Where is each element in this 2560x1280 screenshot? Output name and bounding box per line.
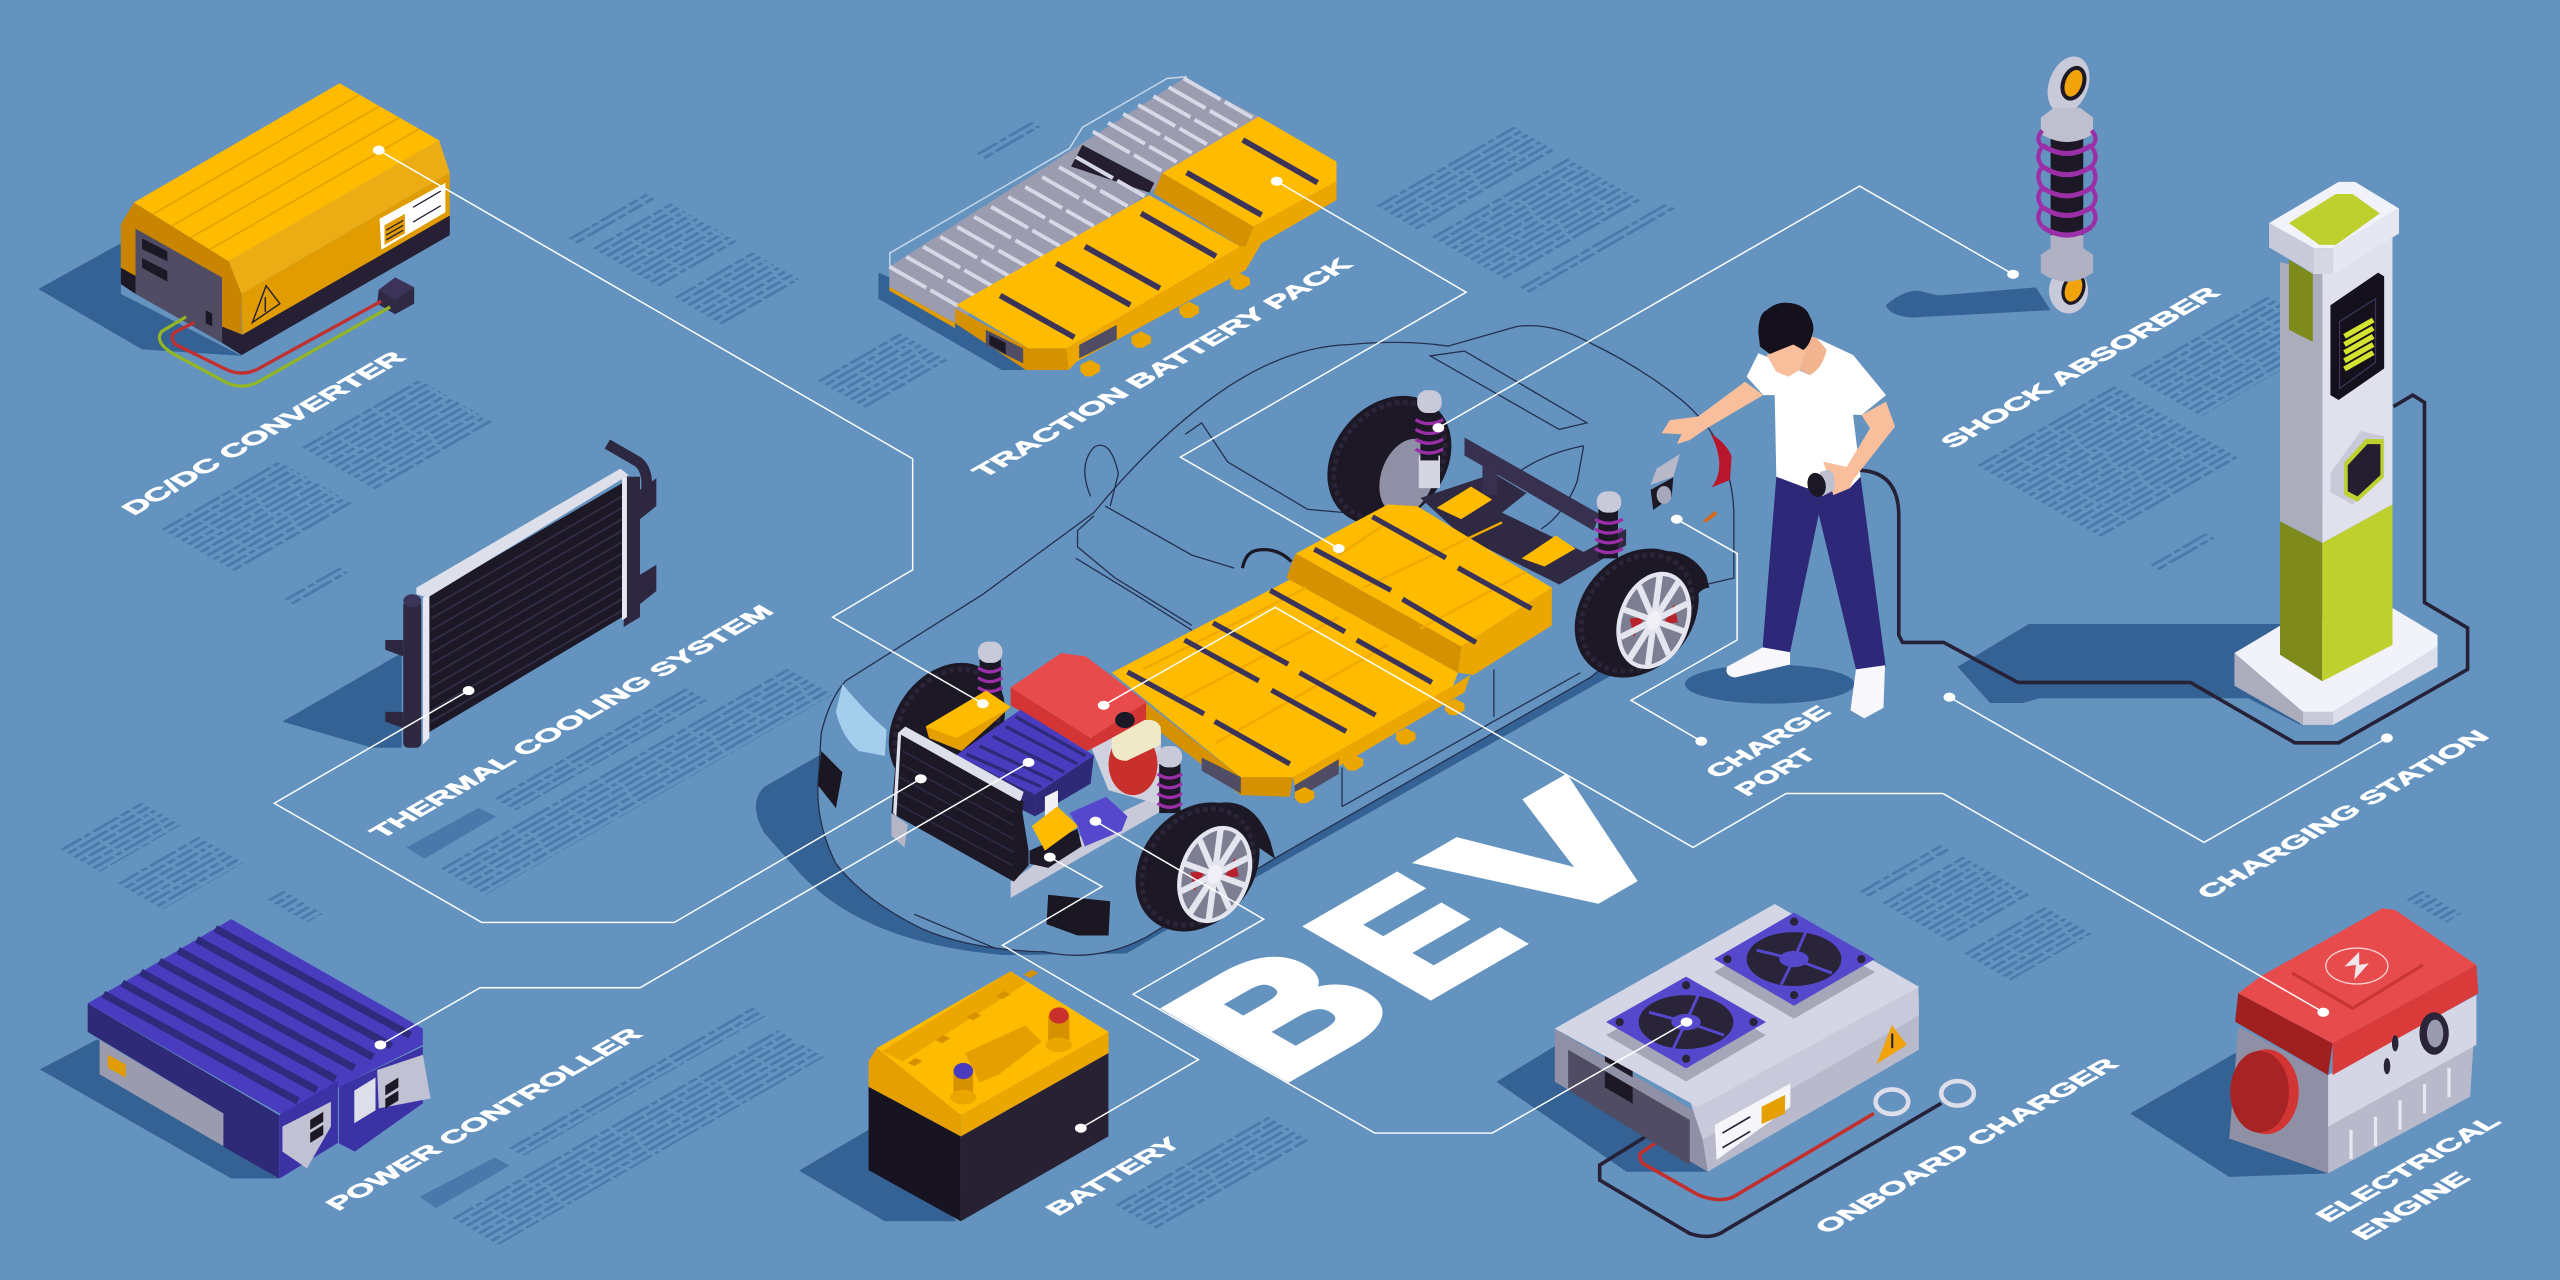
mini battery bbox=[1030, 807, 1082, 868]
leader: traction battery bbox=[1180, 181, 1466, 549]
title BEV bbox=[1121, 759, 1720, 1105]
dot: traction part bbox=[1271, 177, 1283, 186]
orange marker bbox=[1703, 511, 1718, 522]
DC/DC converter bbox=[38, 83, 450, 386]
main battery pack bbox=[1112, 504, 1552, 803]
left tank bbox=[385, 594, 421, 748]
lid top bbox=[877, 971, 1109, 1115]
socket housing bbox=[2330, 431, 2384, 504]
cap right bbox=[2333, 208, 2399, 274]
shadow bbox=[282, 653, 402, 748]
terminal ring 2 bbox=[1941, 1081, 1974, 1106]
mini engine bbox=[1011, 653, 1158, 795]
rear far shock bbox=[1416, 390, 1443, 488]
filler: dc converter lower bbox=[162, 461, 353, 571]
label: power controller: POWER CONTROLLER bbox=[321, 1025, 649, 1214]
lid right bbox=[2333, 965, 2478, 1075]
filler: shock absorber main bbox=[1977, 386, 2240, 538]
filler: top left header bbox=[568, 193, 657, 245]
dot: station left bbox=[1944, 693, 1955, 702]
filler: top left main bbox=[593, 203, 737, 287]
charging station bbox=[2234, 182, 2438, 725]
filler: thermal main bbox=[441, 669, 832, 895]
grey block under engine bbox=[1087, 727, 1161, 805]
body left bbox=[2229, 1027, 2328, 1173]
filler: onboard header bbox=[1860, 845, 1951, 898]
leader: charge port bbox=[1631, 519, 1737, 741]
front face bbox=[279, 1081, 338, 1179]
sticker icon bbox=[384, 214, 405, 245]
label: charging station: CHARGING STATION bbox=[2192, 727, 2496, 903]
body left bbox=[869, 1087, 961, 1221]
filler: left lower bbox=[118, 837, 243, 909]
screen bbox=[2330, 273, 2384, 400]
label: battery: BATTERY bbox=[1041, 1134, 1188, 1219]
car outline bbox=[818, 326, 1734, 955]
dot: controller part bbox=[375, 1040, 386, 1049]
black cable bbox=[1600, 1103, 1941, 1236]
filler: left small bbox=[268, 891, 323, 922]
battery bars bbox=[2344, 320, 2373, 369]
dot: shock part bbox=[2007, 270, 2019, 279]
socket ring bbox=[2344, 439, 2384, 502]
rear section top bbox=[1162, 117, 1336, 227]
terminal ring 1 bbox=[1876, 1089, 1908, 1114]
cell caps bbox=[908, 970, 1038, 1066]
shadow bbox=[40, 1039, 279, 1178]
face bbox=[1767, 336, 1812, 377]
filler: below battery pack bbox=[818, 333, 948, 408]
dot: charger part bbox=[1681, 1017, 1692, 1027]
leader: charging station bbox=[1949, 697, 2387, 842]
charging cable bbox=[1856, 395, 2468, 743]
thermal cooling radiator bbox=[282, 444, 656, 748]
cells base bbox=[889, 78, 1259, 323]
port socket bbox=[1651, 477, 1673, 510]
fin grooves bbox=[104, 928, 410, 1101]
pillar lower right bbox=[2322, 504, 2392, 681]
dot: station right bbox=[2381, 733, 2393, 743]
connector box bbox=[377, 278, 414, 314]
connector slots bbox=[310, 1078, 398, 1143]
port face bbox=[1657, 486, 1671, 504]
fan recess bbox=[1606, 926, 1875, 1081]
filler: above battery pack bbox=[976, 122, 1044, 161]
red cable bbox=[1640, 1113, 1874, 1200]
base mid bbox=[2303, 712, 2333, 725]
mini power controller bbox=[956, 710, 1094, 816]
filler: onboard main bbox=[1882, 856, 2031, 942]
sticker icon bbox=[1762, 1095, 1785, 1124]
shirt bbox=[1747, 338, 1886, 488]
filler: shock absorber upper bbox=[2131, 296, 2338, 416]
top fins bbox=[88, 919, 423, 1115]
letter B: B bbox=[1121, 920, 1441, 1105]
frame rails bbox=[423, 477, 627, 744]
label: charge: CHARGE bbox=[1700, 703, 1837, 782]
sticker bbox=[1715, 1083, 1790, 1160]
dot: engine on chassis bbox=[1098, 701, 1110, 710]
small holes bbox=[2384, 1035, 2398, 1074]
lid right bbox=[961, 1032, 1109, 1136]
filler: dc converter footer bbox=[284, 567, 352, 607]
body right bbox=[961, 1053, 1108, 1221]
mini charger bbox=[1069, 797, 1128, 846]
fins bbox=[2351, 1068, 2449, 1159]
green cable bbox=[159, 307, 390, 386]
label: DC/DC converter: DC/DC CONVERTER bbox=[117, 348, 412, 519]
filler: dc converter upper bbox=[302, 380, 493, 490]
right rail and brackets bbox=[624, 477, 656, 627]
front intake bbox=[818, 751, 842, 808]
rear frame bbox=[1420, 438, 1626, 584]
label panel bbox=[108, 1055, 126, 1078]
fan 1 bbox=[1606, 977, 1766, 1068]
left arm bbox=[1662, 382, 1763, 444]
dot: radiator on chassis bbox=[915, 774, 927, 783]
lid left bbox=[869, 1048, 961, 1136]
shadow bbox=[1496, 1047, 1708, 1172]
cell tops bbox=[889, 78, 1252, 306]
plug bbox=[1805, 469, 1835, 499]
letter V: V bbox=[1387, 760, 1720, 952]
fins bbox=[431, 496, 622, 722]
leader: shock absorber bbox=[1438, 186, 2013, 428]
electrical engine bbox=[2130, 908, 2478, 1177]
negative terminal bbox=[950, 1063, 976, 1104]
label: engine: ENGINE bbox=[2347, 1169, 2477, 1244]
label: thermal cooling system: THERMAL COOLING SYSTEM bbox=[365, 602, 780, 842]
socket hole bbox=[2348, 444, 2380, 496]
filler: battery bbox=[1115, 1117, 1310, 1229]
cables bbox=[159, 301, 390, 386]
indicator panel bbox=[354, 1078, 376, 1123]
fan 2 bbox=[1714, 913, 1875, 1006]
front section side bbox=[1066, 243, 1262, 370]
slots bbox=[1605, 1045, 1633, 1104]
front face bbox=[121, 202, 242, 335]
trousers bbox=[1763, 477, 1886, 669]
base right bbox=[2333, 647, 2438, 725]
shadow bbox=[799, 1130, 957, 1221]
12V battery bbox=[799, 970, 1109, 1221]
core bbox=[428, 483, 622, 733]
filler: engine small bbox=[2407, 891, 2462, 922]
car shadow bbox=[756, 661, 1616, 955]
car body silhouette bbox=[818, 326, 1734, 955]
lid ridge bbox=[882, 971, 1027, 1061]
shadow bbox=[878, 273, 1025, 370]
pipe bbox=[607, 444, 647, 490]
right connector bbox=[377, 1055, 431, 1108]
label: onboard charger: ONBOARD CHARGER bbox=[1810, 1055, 2125, 1237]
base left bbox=[2234, 653, 2303, 725]
coolant bottle bbox=[1112, 712, 1161, 761]
top bar bbox=[416, 469, 629, 598]
filler: thermal upper bbox=[495, 688, 707, 811]
body right light bbox=[2328, 995, 2476, 1127]
filler: left upper bbox=[60, 802, 181, 872]
letter E: E bbox=[1264, 850, 1563, 1023]
filler: power main bbox=[452, 1030, 824, 1245]
battery outline bbox=[2340, 299, 2376, 389]
coil bbox=[2042, 145, 2091, 235]
right arm bbox=[1823, 402, 1895, 495]
mini dc converter bbox=[926, 691, 1011, 751]
upper cap bbox=[2041, 108, 2093, 142]
leader: onboard charger bbox=[1096, 821, 1687, 1133]
side upper bbox=[229, 140, 450, 294]
right shoe bbox=[1850, 665, 1885, 718]
vents bbox=[142, 238, 212, 327]
cables bbox=[1600, 1103, 1941, 1236]
front near shock bbox=[1158, 746, 1182, 813]
label: port: PORT bbox=[1730, 746, 1823, 800]
black core bbox=[2051, 137, 2083, 235]
front near wheel bbox=[1110, 777, 1285, 956]
dot: charger on chassis bbox=[1090, 817, 1101, 826]
pillar lower left bbox=[2280, 521, 2322, 681]
lid top bbox=[2238, 908, 2476, 1043]
dot: pack on chassis bbox=[1333, 544, 1345, 553]
pillar upper left bbox=[2280, 262, 2322, 543]
car interior lines bbox=[914, 351, 1587, 949]
front lower intake bbox=[1047, 895, 1110, 936]
charging station shadow bbox=[1958, 624, 2300, 725]
body right bbox=[2328, 995, 2476, 1173]
sticker text lines bbox=[1722, 1117, 1750, 1148]
dot: DC/DC part bbox=[373, 146, 385, 155]
shadow bbox=[38, 243, 242, 356]
outline: battery cells bbox=[890, 77, 1187, 266]
rear section face bbox=[1153, 173, 1254, 247]
cap green bbox=[2289, 194, 2380, 245]
top eye bbox=[2040, 51, 2097, 119]
center block bbox=[965, 1025, 1042, 1082]
right side bbox=[1699, 995, 1919, 1172]
neck bbox=[1800, 336, 1827, 375]
label: electrical: ELECTRICAL bbox=[2311, 1112, 2507, 1226]
front base plate bbox=[1011, 793, 1161, 898]
filler: traction header bbox=[1376, 127, 1556, 230]
leader: battery bbox=[1002, 857, 1198, 1128]
roof ribs bbox=[153, 95, 419, 249]
dot: mini DC/DC bbox=[977, 699, 989, 708]
hand over plug bbox=[1823, 462, 1853, 495]
dot: charge port on car bbox=[1671, 515, 1683, 524]
filler: traction main bbox=[1432, 158, 1643, 280]
hair bbox=[1758, 303, 1813, 354]
leader dots bbox=[373, 146, 2393, 1133]
dark base left bbox=[121, 268, 136, 294]
shadow bbox=[1886, 287, 2051, 318]
gap bbox=[1071, 145, 1154, 193]
grey port bbox=[2419, 1012, 2449, 1055]
front section face bbox=[955, 309, 1069, 370]
filler: shock absorber footer bbox=[2150, 533, 2218, 572]
leader lines bbox=[274, 77, 2387, 1133]
dot: battery on chassis bbox=[1044, 853, 1056, 862]
left connector bbox=[282, 1102, 331, 1168]
rear section side bbox=[1246, 181, 1336, 247]
ports bbox=[986, 325, 1117, 363]
base top bbox=[2234, 608, 2438, 712]
lid recess bbox=[2292, 965, 2423, 1008]
left side bbox=[88, 1003, 279, 1178]
front radiator bbox=[891, 727, 1029, 882]
top bbox=[1555, 904, 1919, 1107]
sticker bbox=[380, 183, 445, 250]
rear near shock bbox=[1595, 491, 1623, 558]
power heading bar bbox=[420, 1158, 509, 1208]
cap left bbox=[2269, 223, 2314, 274]
grey strip bbox=[100, 1040, 223, 1146]
label: shock absorber: SHOCK ABSORBER bbox=[1935, 284, 2226, 452]
labels bbox=[117, 255, 2507, 1244]
dot: controller on chassis bbox=[1023, 758, 1034, 767]
shadow bbox=[2130, 1051, 2328, 1177]
dot: radiator part bbox=[463, 686, 474, 695]
grey panel bbox=[136, 229, 222, 343]
bottom eye bbox=[2049, 268, 2090, 313]
port flap bbox=[1651, 454, 1680, 485]
port hole bbox=[989, 335, 1006, 354]
red tail flap bbox=[1711, 433, 1732, 487]
lower cap bbox=[2041, 229, 2093, 282]
leader: electrical engine bbox=[1104, 607, 2323, 1012]
warning icon bbox=[252, 286, 280, 322]
roof bbox=[134, 83, 439, 261]
lightning badge bbox=[2326, 948, 2388, 984]
front section top bbox=[956, 195, 1240, 348]
warning icon bbox=[1877, 1025, 1907, 1064]
leader: thermal cooling bbox=[274, 691, 921, 922]
filler: onboard lower bbox=[1964, 907, 2091, 980]
filler: top left lower bbox=[674, 252, 802, 326]
traction battery pack bbox=[878, 78, 1336, 376]
battery pack ports bbox=[1202, 758, 1241, 793]
red cable bbox=[172, 301, 381, 373]
bars bbox=[1000, 140, 1318, 337]
chamfer bbox=[1690, 986, 1919, 1140]
lid left bbox=[2235, 993, 2333, 1075]
car charge port bbox=[1651, 433, 1732, 522]
dot: shock on chassis bbox=[1432, 423, 1444, 432]
steering wheel bbox=[1242, 550, 1291, 568]
front far shock bbox=[978, 642, 1002, 696]
headlight bbox=[836, 684, 887, 756]
shock absorber bbox=[1886, 51, 2097, 318]
label: traction battery pack: TRACTION BATTERY PACK bbox=[967, 255, 1359, 481]
pillar upper right bbox=[2322, 238, 2392, 543]
cap mid bbox=[2314, 248, 2333, 274]
left side bbox=[1555, 1029, 1708, 1172]
chassis bbox=[865, 371, 1724, 956]
dark panel bbox=[1568, 1050, 1690, 1165]
bumps bbox=[1080, 273, 1250, 376]
leader: DC/DC converter bbox=[379, 150, 983, 704]
battery pack bars bbox=[1128, 517, 1531, 764]
right module bbox=[339, 1047, 423, 1152]
coil sides bbox=[2038, 131, 2096, 227]
side green strip bbox=[2289, 260, 2313, 342]
onboard charger bbox=[1496, 904, 1974, 1236]
thermal heading bar bbox=[407, 808, 496, 859]
battery pack bumps bbox=[1295, 699, 1464, 803]
red drum bbox=[2230, 1049, 2299, 1134]
cap top bbox=[2269, 182, 2399, 248]
dot: charge port label bbox=[1695, 737, 1707, 746]
dot: battery part bbox=[1075, 1124, 1087, 1133]
left shoe bbox=[1726, 647, 1790, 678]
man shadow bbox=[1685, 664, 1855, 704]
positive terminal bbox=[1046, 1007, 1072, 1052]
leader: power controller bbox=[380, 762, 1029, 1045]
man charging bbox=[1662, 303, 1895, 718]
power controller bbox=[40, 919, 431, 1179]
dot: engine part bbox=[2317, 1008, 2329, 1017]
rear far wheel bbox=[1302, 371, 1477, 550]
filler: power upper bbox=[509, 1007, 768, 1156]
side lower bbox=[242, 173, 450, 335]
front far wheel bbox=[865, 640, 1029, 813]
rear near wheel bbox=[1549, 524, 1724, 703]
dark base right bbox=[222, 216, 450, 355]
filler: traction footer bbox=[1520, 203, 1678, 295]
yellow base strip bbox=[889, 287, 955, 328]
sticker text lines bbox=[386, 191, 441, 240]
